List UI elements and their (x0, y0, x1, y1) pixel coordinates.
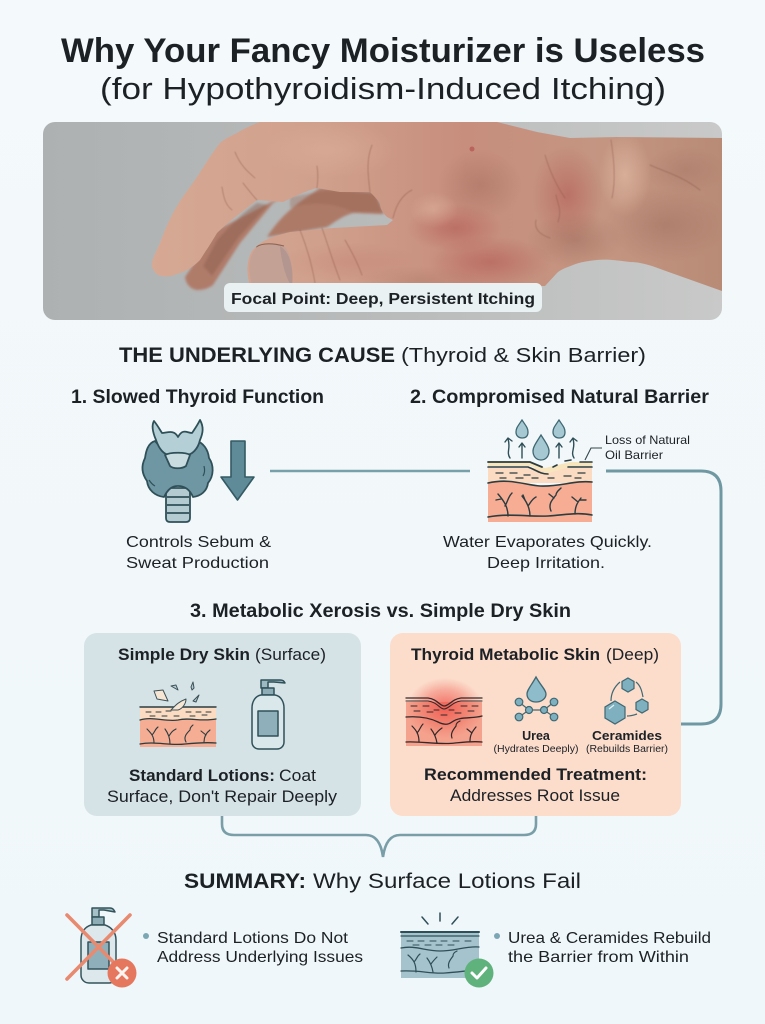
photo caption (224, 283, 542, 312)
heading: summary: Why Surface Lotions Fail (313, 870, 581, 893)
label: ceramides: (Rebuilds Barrier) (586, 744, 668, 755)
icon: damaged skin barrier with evaporating water (488, 420, 592, 522)
title: Why Your Fancy Moisturizer is Useless (61, 32, 705, 70)
heading: summary: SUMMARY: (184, 870, 306, 893)
icon: inflamed deep skin (406, 678, 483, 746)
icon: urea (515, 677, 558, 721)
icon: flaking skin (140, 682, 216, 747)
text: recommended treatment: Recommended Treatment: (424, 765, 647, 784)
heading: metabolic xerosis: 3. Metabolic Xerosis vs. Simple Dry Skin (190, 601, 571, 622)
photo: hand with irritated skin (43, 118, 730, 320)
text: standard lotions: Surface, Don't Repair Deeply (107, 787, 338, 806)
icon: repaired skin with check (401, 913, 494, 988)
icon: crossed out lotion bottle (67, 908, 136, 988)
icon: thyroid gland (143, 420, 213, 522)
text: water evaporates (443, 534, 652, 572)
label: urea (494, 729, 578, 755)
text: standard lotions (107, 766, 338, 806)
connector: barrier to thyroid metabolic skin (606, 471, 721, 724)
label: urea: Urea (522, 729, 551, 743)
connector: thyroid to barrier (270, 470, 470, 472)
panel: simple dry skin: (Surface) (255, 646, 326, 664)
callout: loss of natural oil barrier (585, 433, 690, 462)
label: ceramides: Ceramides (592, 729, 662, 743)
text: standard lotions: Standard Lotions: (129, 766, 275, 785)
panel: thyroid metabolic skin: Thyroid Metabolic Skin (411, 645, 600, 664)
text: water evaporates: Water Evaporates Quickly. (443, 534, 652, 551)
text: water evaporates: Deep Irritation. (487, 555, 605, 572)
text: controls sebum (126, 534, 271, 572)
heading: underlying cause: THE UNDERLYING CAUSE (119, 344, 395, 367)
heading: compromised natural barrier: 2. Compromised Natural Barrier (410, 387, 710, 408)
title: (for Hypothyroidism-Induced Itching) (100, 71, 666, 106)
text: recommended treatment: Addresses Root Issue (450, 786, 620, 805)
photo caption: Focal Point: Deep, Persistent Itching (231, 291, 535, 308)
heading: summary (184, 870, 581, 893)
label: ceramides (586, 729, 668, 755)
heading: slowed thyroid function: 1. Slowed Thyroid Function (71, 387, 324, 408)
title (61, 32, 705, 106)
text: urea and ceramides bullet: the Barrier from Within (508, 949, 689, 966)
icon: lotion bottle (252, 680, 285, 749)
label: urea: (Hydrates Deeply) (494, 744, 578, 755)
callout: loss of natural oil barrier: Oil Barrier (605, 448, 663, 462)
text: standard lotions bullet: Standard Lotions Do Not (157, 930, 349, 947)
heading: underlying cause: (Thyroid & Skin Barrier) (401, 344, 646, 367)
panel: thyroid metabolic skin (390, 633, 681, 816)
bracket: joins both panels to summary (222, 816, 536, 857)
panel: thyroid metabolic skin: (Deep) (606, 646, 659, 664)
text: standard lotions bullet: Address Underlying Issues (157, 949, 363, 966)
text: standard lotions bullet (143, 930, 363, 966)
panel: simple dry skin (84, 633, 361, 816)
text: urea and ceramides bullet: Urea & Ceramides Rebuild (508, 930, 711, 947)
panel: simple dry skin: Simple Dry Skin (118, 645, 250, 664)
text: standard lotions: Coat (279, 766, 316, 785)
text: recommended treatment (424, 765, 647, 805)
heading: underlying cause (119, 344, 646, 367)
text: urea and ceramides bullet (494, 930, 711, 966)
callout: loss of natural oil barrier: Loss of Natural (605, 433, 690, 447)
icon: down arrow (221, 441, 254, 500)
text: controls sebum: Controls Sebum & (126, 534, 271, 551)
icon: ceramides (605, 678, 648, 724)
text: controls sebum: Sweat Production (126, 555, 269, 572)
